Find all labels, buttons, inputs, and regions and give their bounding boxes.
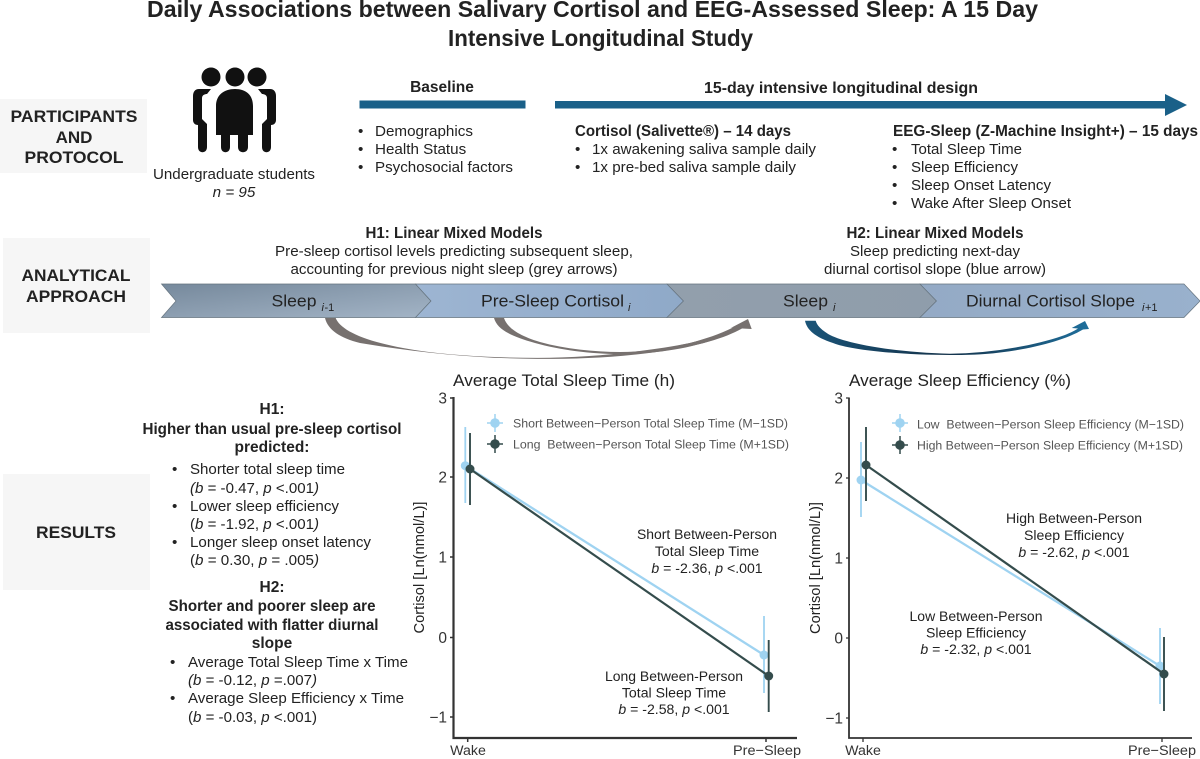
- EEG sleep list: •: [892, 159, 897, 176]
- H2 results text: (b = -0.12, p =.007): [188, 672, 317, 689]
- annotation: high: Sleep Efficiency: [1024, 527, 1125, 543]
- annotation: short: [637, 526, 777, 576]
- cortisol list: [575, 123, 816, 176]
- EEG sleep list: •: [892, 195, 897, 212]
- chevron: diurnal cortisol slope: [920, 284, 1200, 318]
- arrow: blue sleep i to diurnal slope: [805, 321, 1089, 355]
- H1 description: [275, 225, 633, 278]
- H2 results text: associated with flatter diurnal: [166, 617, 378, 634]
- H2 description: diurnal cortisol slope (blue arrow): [824, 261, 1046, 278]
- chart: average total sleep time: [412, 371, 801, 759]
- panel: participants and protocol label: PARTICIPANTS: [10, 107, 138, 126]
- EEG sleep list: [892, 123, 1198, 212]
- x axis tick labels: [450, 743, 801, 759]
- participants caption: n = 95: [213, 184, 256, 201]
- cortisol list: •: [575, 141, 580, 158]
- annotation: short: Short Between-Person: [637, 526, 777, 542]
- H1 description: H1: Linear Mixed Models: [366, 225, 542, 242]
- annotation: high: b = -2.62, p <.001: [1018, 544, 1130, 560]
- H2 description: H2: Linear Mixed Models: [846, 225, 1024, 242]
- x axis tick labels: Pre−Sleep: [733, 743, 801, 759]
- H1 results text: (b = -0.47, p <.001): [190, 480, 319, 497]
- panel: participants and protocol label: AND: [56, 128, 92, 147]
- chevron: pre-sleep cortisol: [416, 284, 684, 318]
- y axis tick labels: [429, 390, 447, 726]
- cortisol list: Cortisol (Salivette®) – 14 days: [575, 123, 791, 140]
- chart title: Average Total Sleep Time (h): [453, 371, 675, 390]
- annotation: long: [605, 668, 743, 717]
- y axis tick labels: 0: [438, 630, 447, 647]
- baseline bar: [360, 100, 526, 108]
- H1 results text: Longer sleep onset latency: [190, 534, 371, 551]
- EEG sleep list: EEG-Sleep (Z-Machine Insight+) – 15 days: [893, 123, 1198, 140]
- x axis tick labels: [845, 743, 1196, 759]
- baseline list: •: [358, 141, 363, 158]
- y axis tick labels: 0: [834, 630, 843, 648]
- series: high efficiency: [862, 427, 1168, 711]
- H2 results text: •: [170, 690, 175, 707]
- baseline list: Health Status: [375, 141, 467, 158]
- panel: analytical approach label: [3, 238, 150, 333]
- H1 results text: •: [172, 461, 177, 478]
- annotation: low: b = -2.32, p <.001: [920, 641, 1032, 657]
- H1 results text: (b = 0.30, p = .005): [190, 552, 319, 569]
- chevron: sleep i: Sleep: [783, 292, 828, 310]
- H2 results text: H2:: [260, 579, 284, 596]
- chevron: pre-sleep cortisol: Pre-Sleep Cortisol: [481, 292, 624, 310]
- baseline list: [358, 123, 513, 176]
- panel: results label: RESULTS: [36, 523, 116, 542]
- arrow: grey pre-sleep cortisol to sleep i: [494, 318, 727, 354]
- H1 description: Pre-sleep cortisol levels predicting subsequent sleep,: [275, 243, 633, 260]
- chart title: Average Sleep Efficiency (%): [849, 371, 1071, 390]
- H1 description: accounting for previous night sleep (grey arrows): [290, 261, 618, 278]
- chevron: sleep i-1: -1: [324, 302, 334, 314]
- H1 results text: •: [172, 534, 177, 551]
- chevron: sleep i: [667, 284, 936, 318]
- annotation: low: Low Between-Person: [910, 608, 1042, 624]
- y axis tick labels: 1: [834, 550, 843, 568]
- H2 description: Sleep predicting next-day: [850, 243, 1020, 260]
- H1 results text: Higher than usual pre-sleep cortisol: [142, 421, 402, 438]
- chevron: sleep i-1: Sleep: [272, 292, 316, 310]
- H2 results text: [166, 579, 408, 726]
- annotation: low: [910, 608, 1042, 657]
- baseline list: •: [358, 123, 363, 140]
- H1 results text: predicted:: [235, 439, 309, 456]
- baseline list: Psychosocial factors: [375, 159, 513, 176]
- annotation: long: Total Sleep Time: [622, 684, 726, 700]
- EEG sleep list: Total Sleep Time: [911, 141, 1022, 158]
- annotation: long: Long Between-Person: [605, 668, 743, 684]
- H2 description: [824, 225, 1046, 278]
- EEG sleep list: Sleep Efficiency: [911, 159, 1018, 176]
- legend: [892, 414, 1184, 454]
- baseline list: Demographics: [375, 123, 473, 140]
- y axis tick labels: [825, 390, 843, 728]
- chevron: sleep i-1: i: [322, 302, 324, 314]
- y axis tick labels: 3: [834, 390, 843, 408]
- design heading: 15-day intensive longitudinal design: [704, 80, 978, 97]
- icon: group of three people: [193, 68, 276, 152]
- y axis label: Cortisol [Ln(nmol/L)]: [808, 502, 824, 634]
- y axis tick labels: −1: [429, 710, 447, 726]
- annotation: low: Sleep Efficiency: [926, 624, 1027, 640]
- y axis tick labels: 2: [438, 470, 447, 486]
- H2 results text: (b = -0.03, p <.001): [188, 709, 317, 726]
- cortisol list: 1x awakening saliva sample daily: [592, 141, 816, 158]
- annotation: high: High Between-Person: [1006, 510, 1142, 526]
- y axis tick labels: 1: [438, 550, 447, 566]
- arrow: grey sleep i-1 to sleep i: [325, 318, 752, 359]
- cortisol list: •: [575, 159, 580, 176]
- chevron: sleep i-1: [162, 284, 431, 318]
- panel: results label: [3, 474, 150, 590]
- H1 results text: H1:: [260, 401, 284, 418]
- series: short sleep: [461, 427, 768, 693]
- x axis tick labels: Wake: [450, 743, 486, 759]
- series: low efficiency: [856, 442, 1164, 704]
- legend: High Between−Person Sleep Efficiency (M+1SD): [917, 438, 1183, 452]
- participants caption: Undergraduate students: [153, 166, 315, 183]
- chevron: diurnal cortisol slope: i: [1142, 302, 1145, 314]
- x axis tick labels: Pre−Sleep: [1128, 743, 1196, 759]
- H2 results text: Average Sleep Efficiency x Time: [188, 690, 404, 707]
- title: Intensive Longitudinal Study: [448, 25, 753, 51]
- EEG sleep list: Wake After Sleep Onset: [911, 195, 1072, 212]
- annotation: short: Total Sleep Time: [655, 543, 759, 559]
- panel: analytical approach label: APPROACH: [26, 287, 126, 306]
- H1 results text: Lower sleep efficiency: [190, 498, 339, 515]
- annotation: high: [1006, 510, 1142, 560]
- x axis tick labels: Wake: [845, 743, 881, 759]
- annotation: long: b = -2.58, p <.001: [618, 701, 730, 717]
- panel: participants and protocol label: PROTOCOL: [24, 148, 124, 167]
- y axis tick labels: 2: [834, 470, 843, 488]
- chevron: sleep i: i: [833, 302, 836, 314]
- y axis tick labels: −1: [825, 710, 843, 728]
- EEG sleep list: •: [892, 177, 897, 194]
- y axis tick labels: 3: [438, 390, 447, 408]
- chart: average sleep efficiency: [808, 371, 1196, 759]
- H1 results text: •: [172, 498, 177, 515]
- panel: participants and protocol label: [0, 99, 147, 173]
- chevron ribbon: [162, 284, 1200, 318]
- H2 results text: Average Total Sleep Time x Time: [188, 654, 408, 671]
- H1 results text: Shorter total sleep time: [190, 461, 345, 478]
- chevron: diurnal cortisol slope: +1: [1145, 302, 1158, 314]
- H1 results text: [142, 401, 402, 569]
- legend: Low Between−Person Sleep Efficiency (M−1SD): [917, 418, 1184, 432]
- cortisol list: 1x pre-bed saliva sample daily: [592, 159, 796, 176]
- axes: [450, 397, 797, 742]
- participants caption: [153, 166, 315, 201]
- annotation: short: b = -2.36, p <.001: [651, 560, 763, 576]
- EEG sleep list: Sleep Onset Latency: [911, 177, 1051, 194]
- legend: Short Between−Person Total Sleep Time (M−1SD): [513, 416, 788, 430]
- baseline heading: Baseline: [410, 79, 474, 96]
- arrow: 15-day timeline: [555, 94, 1187, 116]
- H2 results text: •: [170, 654, 175, 671]
- baseline list: •: [358, 159, 363, 176]
- chevron: pre-sleep cortisol: i: [628, 302, 631, 314]
- H1 results text: (b = -1.92, p <.001): [190, 516, 319, 533]
- legend: Long Between−Person Total Sleep Time (M+1SD): [513, 438, 789, 452]
- axes: [846, 398, 1192, 742]
- chevron: diurnal cortisol slope: Diurnal Cortisol Slope: [966, 292, 1135, 310]
- y axis label: Cortisol [Ln(nmol/L)]: [412, 502, 428, 634]
- legend: [487, 414, 789, 453]
- H2 results text: Shorter and poorer sleep are: [168, 598, 376, 615]
- panel: analytical approach label: ANALYTICAL: [22, 266, 130, 285]
- title: [147, 0, 1038, 51]
- series: long sleep: [466, 433, 773, 712]
- EEG sleep list: •: [892, 141, 897, 158]
- H2 results text: slope: [252, 635, 293, 652]
